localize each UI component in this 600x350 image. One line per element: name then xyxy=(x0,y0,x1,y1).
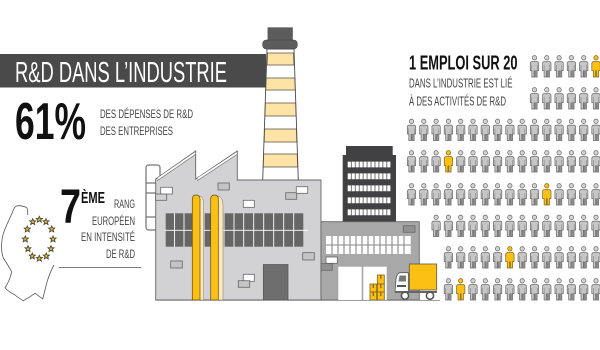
icon: map outline with European stars xyxy=(2,206,56,301)
stat: 7th rank: RANG xyxy=(114,197,135,211)
warehouse windows xyxy=(326,236,411,254)
stacked boxes xyxy=(370,275,384,300)
factory body xyxy=(156,151,321,300)
icon: delivery truck xyxy=(395,264,437,299)
pictogram grid: 100 workers, 5 highlighted xyxy=(407,56,600,300)
stat: 61 percent: DES ENTREPRISES xyxy=(100,124,173,138)
chimney xyxy=(263,28,298,180)
stat: 1 job in 20 xyxy=(409,52,518,109)
stat: 1 job in 20: 1 EMPLOI SUR 20 xyxy=(409,52,518,74)
stat: 7th rank xyxy=(59,181,141,268)
stat: 7th rank: DE R&D xyxy=(106,247,135,261)
warehouse bricks xyxy=(321,226,415,270)
stat: 7th rank: 7 xyxy=(60,181,81,234)
stat: 61 percent xyxy=(15,93,193,151)
stat: 61 percent: DES DÉPENSES DE R&D xyxy=(100,106,193,121)
stat: 61 percent: 61% xyxy=(15,93,86,151)
ground line xyxy=(156,299,440,301)
roof skylights xyxy=(157,153,237,181)
stat: 7th rank: EUROPÉEN xyxy=(92,213,135,228)
door xyxy=(263,264,288,300)
loading doors xyxy=(338,267,387,300)
stat: 1 job in 20: DANS L’INDUSTRIE EST LIÉ xyxy=(409,76,512,91)
side pipe bracket xyxy=(146,165,160,230)
title banner xyxy=(0,54,266,89)
office tower xyxy=(343,146,396,222)
title banner: R&D DANS L’INDUSTRIE xyxy=(15,57,227,89)
window band xyxy=(165,213,308,247)
stat: 1 job in 20: À DES ACTIVITÉS DE R&D xyxy=(409,94,506,109)
yellow pipes xyxy=(192,195,223,300)
main factory building xyxy=(146,151,321,300)
warehouse xyxy=(321,222,419,300)
stat: 7th rank: ÈME xyxy=(81,188,105,207)
wall bricks xyxy=(156,183,314,287)
stat: 7th rank: EN INTENSITÉ xyxy=(81,229,135,244)
